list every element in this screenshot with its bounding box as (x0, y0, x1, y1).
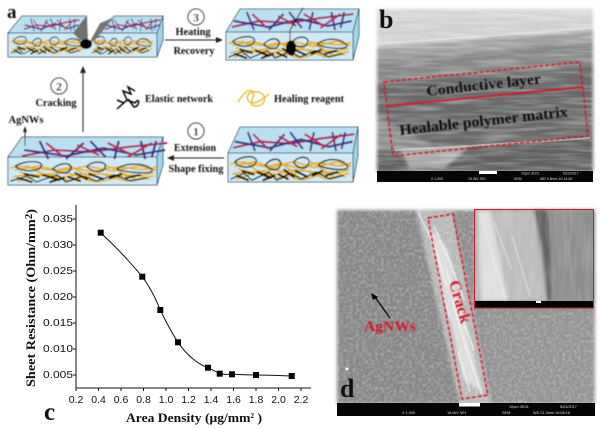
step 2 badge: 2 (56, 80, 62, 94)
y axis tick labels: 0.020 (43, 291, 73, 303)
arrow: AgNWs pointer (23, 126, 27, 146)
y axis tick labels: 0.005 (43, 369, 73, 381)
scale bar d (337, 403, 595, 416)
scale bar d: WD 21.3mm 10:08:18 (533, 411, 570, 415)
label: Elastic network: Elastic network (145, 93, 214, 105)
label: Healable polymer matrix: Healable polymer matrix (399, 104, 569, 139)
x axis tick labels: 2.0 (271, 394, 286, 406)
y axis title: Sheet Resistance (Ohm/mm (23, 234, 38, 387)
scale bar d: 15.0kV SEI (447, 411, 466, 415)
block: original film, bottom right (228, 127, 358, 182)
arrow: step 2 (80, 66, 86, 132)
scale bar b: 5/23/2017 (563, 172, 579, 176)
x axis tick labels: 0.2 (69, 394, 83, 406)
x axis tick labels (69, 394, 308, 406)
y axis title: 2 (24, 214, 35, 219)
y axis tick labels: 0.035 (43, 213, 73, 225)
panel letter d: d (340, 374, 355, 403)
scale bar b: 15.0kV SEI (468, 177, 486, 181)
x axis tick labels: 1.2 (181, 394, 196, 406)
y axis tick labels: 0.030 (43, 239, 73, 251)
panel letter b: b (379, 5, 393, 34)
callout: dashed region (384, 62, 588, 156)
arrow: step 3 (165, 37, 223, 43)
x axis tick labels: 0.6 (114, 394, 128, 406)
SEM image d (337, 210, 595, 416)
icon: elastic network legend (117, 87, 139, 109)
panel letter a: a (7, 2, 17, 23)
scale bar b (377, 171, 593, 182)
x axis title: ) (254, 410, 262, 425)
label: Recovery: Recovery (174, 45, 215, 57)
scale bar b: SEM (514, 177, 522, 181)
label: Shape fixing: Shape fixing (168, 163, 224, 175)
label: AgNWs: AgNWs (364, 319, 416, 335)
step 1 badge (188, 123, 204, 139)
step 2 badge (51, 78, 67, 94)
icon: healing reagent legend (238, 90, 269, 106)
y axis tick labels (43, 213, 73, 381)
x axis tick labels: 0.8 (136, 394, 151, 406)
label: Cracking: Cracking (36, 97, 77, 109)
step 3 badge (188, 9, 204, 25)
arrow: AgNWs pointer (371, 293, 390, 318)
y axis tick labels: 0.015 (43, 317, 73, 329)
step 3 badge: 3 (193, 10, 199, 24)
panel a: self-healing schematic (7, 2, 359, 185)
SEM image b (377, 9, 593, 182)
panel letter c: c (44, 399, 55, 426)
y axis tick labels: 0.010 (43, 343, 73, 355)
x axis title: 2 (250, 412, 255, 420)
scale bar b: X 1,000 (431, 177, 443, 181)
data points (98, 230, 295, 379)
block: healed film, top right (226, 8, 359, 60)
x axis tick labels: 1.0 (159, 394, 173, 406)
label: Healing reagent: Healing reagent (274, 93, 344, 105)
x axis tick labels: 1.6 (226, 394, 241, 406)
x axis tick labels: 1.8 (249, 394, 263, 406)
x axis tick labels: 2.2 (294, 394, 308, 406)
callout: dashed crack outline (428, 214, 488, 399)
callout: inset magnified crack (474, 210, 594, 308)
chart axes (73, 205, 311, 391)
label: AgNWs: AgNWs (8, 114, 44, 126)
scale bar d: 10μm JEOL (509, 405, 529, 409)
scale bar b: 10μm JEOL (521, 172, 540, 176)
scale bar d: SEM (502, 411, 510, 415)
x axis tick labels: 1.4 (204, 394, 218, 406)
scale bar b: WD 9.8mm 10:14:04 (540, 177, 572, 181)
y axis title: ) (23, 209, 38, 214)
label: Heating: Heating (176, 26, 211, 38)
x axis title: Area Density (μg/mm (126, 410, 245, 425)
scale bar d: 5/23/2017 (560, 405, 577, 409)
panel d: SEM top view (337, 210, 595, 416)
label: Crack: Crack (445, 278, 474, 325)
label: Extension: Extension (174, 142, 216, 154)
panel b: SEM cross-section (377, 5, 593, 182)
step 1 badge: 1 (193, 124, 199, 138)
x axis tick labels: 0.4 (91, 394, 106, 406)
block: stretched film, bottom left (8, 137, 167, 185)
y axis tick labels: 0.025 (43, 265, 73, 277)
scale bar d: X 1,000 (402, 411, 415, 415)
arrow: step 1 (167, 155, 224, 161)
curve: sheet resistance (101, 233, 292, 376)
label: Conductive layer: Conductive layer (426, 71, 542, 100)
panel c: line chart (23, 205, 311, 426)
block: cracked film, top left (8, 14, 163, 57)
